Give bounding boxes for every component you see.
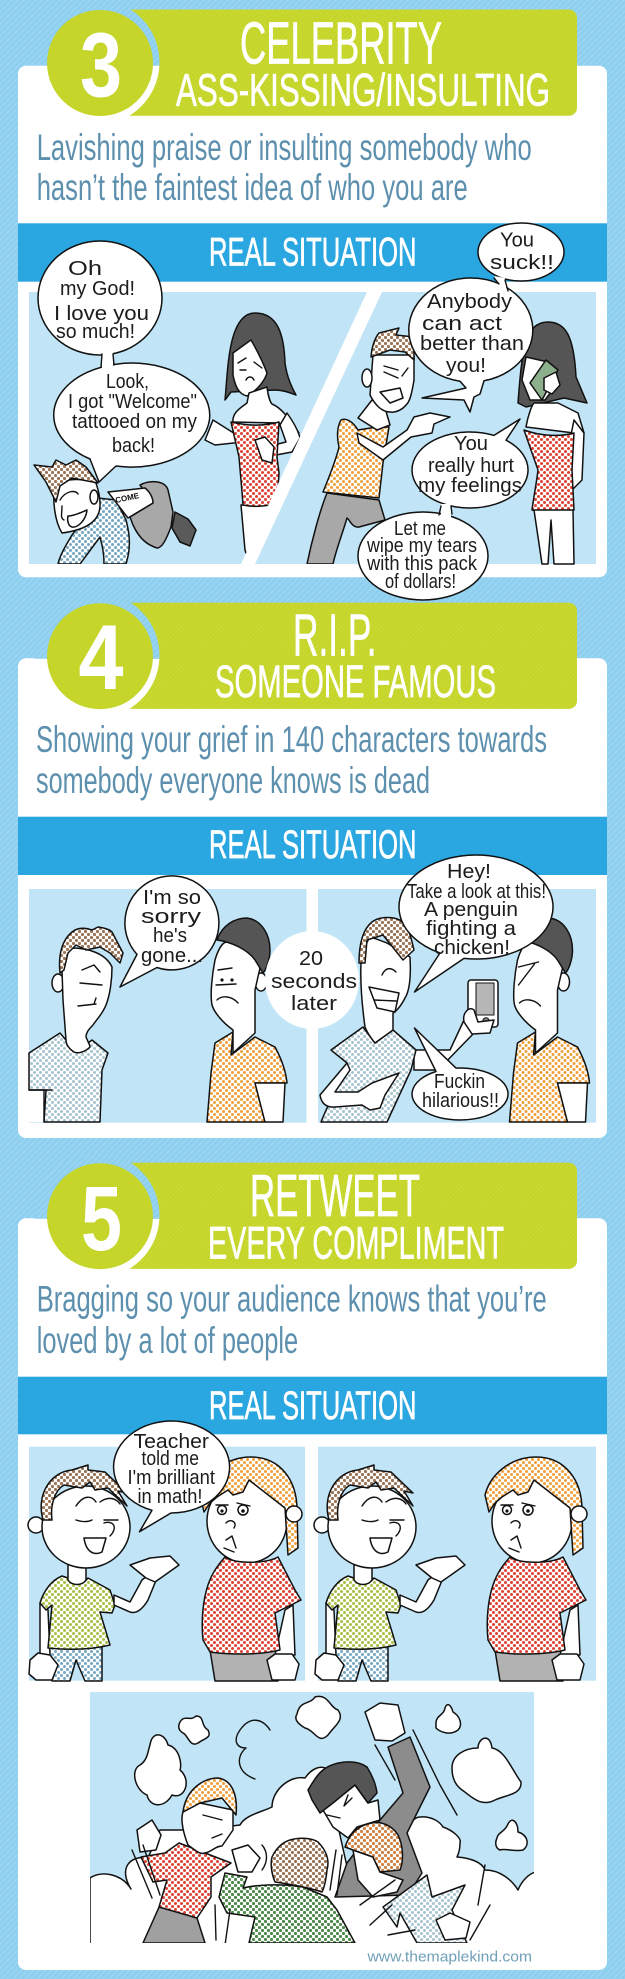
figure: left man with sad face [29, 927, 123, 1122]
speech bubble: tattoo [54, 351, 210, 482]
speech bubble: Hey penguin [399, 855, 553, 992]
description 5: loved by a lot of people [37, 1320, 298, 1361]
callout: 20 seconds later: 20 [299, 948, 323, 970]
speech bubble: Let me wipe my tears [358, 504, 488, 600]
speech bubble: Let me wipe my tears: Let me [394, 518, 446, 540]
description 4: somebody everyone knows is dead [36, 760, 430, 801]
figure: woman in red dress left [205, 313, 300, 564]
speech bubble: hilarious: Fuckin [434, 1071, 485, 1093]
speech bubble: Let me wipe my tears: of dollars! [385, 571, 456, 593]
speech bubble: You suck [478, 223, 564, 293]
comic panel right 4 [318, 889, 596, 1123]
speech bubble: Oh my God: so much! [56, 321, 135, 343]
speech bubble: Anybody can act better: you! [446, 355, 486, 377]
real situation band 5: REAL SITUATION [209, 1384, 416, 1428]
callout: 20 seconds later [265, 931, 359, 1029]
speech bubble: Hey penguin: chicken! [434, 937, 510, 959]
callout: 20 seconds later: seconds [271, 971, 357, 993]
figure: orange haired puncher in red [137, 1778, 236, 1943]
header banner 5: RETWEET [250, 1162, 420, 1229]
speech bubble: Anybody can act better [409, 278, 533, 412]
smoke puffs [135, 1696, 527, 1851]
header banner 4: 4 [78, 607, 124, 709]
comic panel left 4 [29, 889, 306, 1123]
speech bubble: Anybody can act better: can act [422, 313, 503, 335]
speech bubble: I'm so sorry: he's [153, 925, 187, 947]
speech bubble: You really hurt my feelings: really hurt [428, 455, 514, 477]
real situation band 3: REAL SITUATION [209, 231, 416, 275]
header banner 5 [34, 1153, 577, 1278]
figure: crawling man with tattoo: COME [115, 491, 141, 505]
real situation band 4: REAL SITUATION [209, 823, 416, 867]
speech bubble: Teacher told me [114, 1421, 230, 1532]
speech bubble: You suck: You [500, 230, 534, 252]
speech bubble: Hey penguin: Take a look at this! [407, 881, 546, 903]
description 4 [36, 719, 547, 801]
speech bubble: Oh my God [38, 241, 162, 355]
speech bubble: Anybody can act better: Anybody [427, 291, 512, 313]
motion lines [132, 1730, 490, 1945]
header banner 3 [34, 0, 577, 125]
speech bubble: tattoo: I got "Welcome" [68, 391, 197, 413]
dust cloud mass [90, 1767, 536, 1945]
header banner 4 [34, 593, 577, 718]
figure: right man frowning [207, 918, 287, 1122]
figure: fighter in light shirt [345, 1822, 470, 1943]
figure: crawling man with tattoo [34, 460, 196, 564]
comic panel left 5 [29, 1447, 305, 1681]
speech bubble: hilarious [412, 1028, 508, 1120]
card 3 [18, 66, 607, 577]
figure: angry man pointing [307, 328, 450, 564]
speech bubble: Teacher told me: Teacher [134, 1431, 209, 1453]
description 3 [37, 127, 532, 208]
figure: back of head fighter in green [219, 1838, 355, 1943]
header banner 3: CELEBRITY [240, 9, 442, 76]
comic panel bottom: brawl scene [90, 1692, 536, 1945]
real situation band 5 [18, 1377, 607, 1434]
website credit: www.themaplekind.com [366, 1949, 532, 1966]
figure: man with phone [320, 918, 498, 1122]
header banner 3: 3 [80, 15, 122, 117]
speech bubble: tattoo: tattooed on my [72, 411, 197, 433]
section 3: celebrity ass-kissing [18, 0, 607, 600]
speech bubble: You really hurt my feelings [412, 419, 528, 508]
speech bubble: tattoo: Look, [106, 371, 149, 393]
comic panel right 5 [318, 1447, 596, 1681]
speech bubble: Hey penguin: fighting a [426, 918, 517, 940]
speech bubble: Teacher told me: told me [142, 1448, 199, 1470]
speech bubble: hilarious: hilarious!! [422, 1090, 499, 1112]
speech bubble: I'm so sorry: sorry [141, 906, 201, 928]
speech bubble: You really hurt my feelings: You [454, 433, 488, 455]
figure: dark haired puncher [308, 1703, 430, 1897]
figure: bragging boy right [314, 1465, 465, 1681]
speech bubble: Let me wipe my tears: with this pack [366, 553, 478, 575]
card 4 [18, 658, 607, 1138]
speech bubble: Let me wipe my tears: wipe my tears [366, 535, 477, 557]
speech bubble: Teacher told me: I'm brilliant [128, 1467, 215, 1489]
speech bubble: I'm so sorry: I'm so [143, 887, 201, 909]
header banner 4: R.I.P. [293, 602, 377, 669]
speech bubble: You really hurt my feelings: my feelings [418, 475, 522, 497]
figure: right man in second panel [510, 918, 590, 1122]
header banner 5: 5 [81, 1168, 122, 1270]
speech bubble: Hey penguin: Hey! [447, 861, 491, 883]
section 4: R.I.P. someone famous [18, 593, 607, 1138]
card 5 [18, 1218, 607, 1970]
comic panel right 3 [255, 292, 596, 564]
speech bubble: Oh my God: my God! [60, 278, 135, 300]
figure: bragging boy left [28, 1465, 179, 1681]
figure: unimpressed friend right [485, 1457, 587, 1681]
speech bubble: Teacher told me: in math! [138, 1486, 202, 1508]
figure: woman wiping tears with dollars [518, 322, 587, 564]
real situation band 4 [18, 817, 607, 875]
speech bubble: Oh my God: Oh [68, 258, 102, 280]
callout: 20 seconds later: later [291, 993, 337, 1015]
description 5 [37, 1279, 547, 1361]
speech bubble: I'm so sorry [120, 876, 219, 987]
speech bubble: I'm so sorry: gone... [141, 945, 203, 967]
speech bubble: tattoo: back! [112, 435, 155, 457]
section 5: retweet every compliment [18, 1153, 607, 1970]
comic panel left 3 [29, 292, 367, 564]
speech bubble: You suck: suck!! [490, 252, 554, 274]
speech bubble: Anybody can act better: better than [420, 333, 524, 355]
speech bubble: Hey penguin: A penguin [424, 899, 518, 921]
real situation band 3 [18, 223, 607, 282]
figure: unimpressed friend left [200, 1457, 302, 1681]
speech bubble: Oh my God: I love you [54, 303, 149, 325]
